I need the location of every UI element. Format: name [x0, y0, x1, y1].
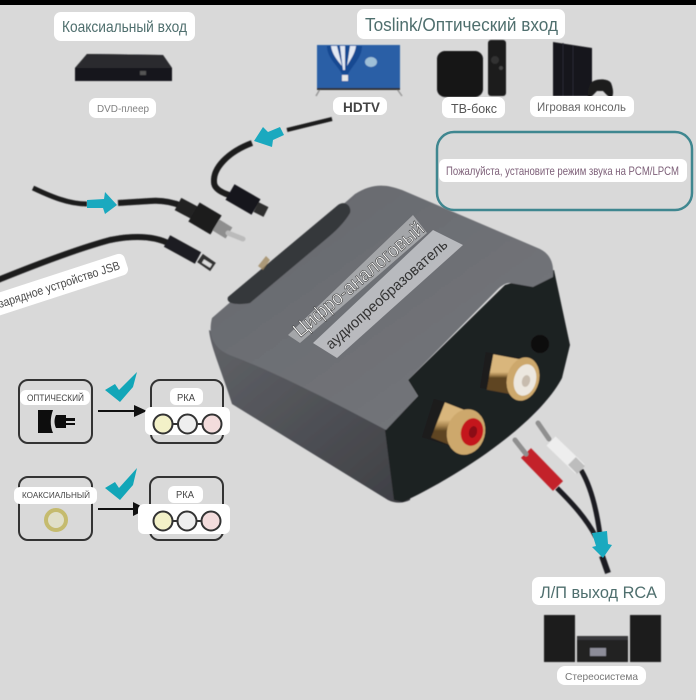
label: HDTV	[333, 97, 387, 115]
RCA ports	[154, 414, 222, 434]
coaxial cable	[33, 188, 243, 239]
arrow: coaxial input	[87, 192, 117, 214]
box: RCA	[151, 380, 223, 443]
icon: optical port	[38, 410, 75, 433]
icon: coaxial port	[46, 510, 66, 530]
title: coaxial input: Коаксиальный вход	[62, 19, 188, 36]
label: RCA: РКА	[177, 393, 195, 404]
title: RCA output	[532, 577, 665, 605]
device: DAC converter	[209, 186, 570, 503]
label: coaxial: КОАКСИАЛЬНЫЙ	[22, 489, 90, 500]
label: DAC name: аудиопреобразователь	[322, 236, 451, 353]
RCA output cable	[515, 423, 608, 573]
red plug	[526, 453, 558, 486]
white plug	[551, 441, 580, 469]
label: TV box	[442, 97, 505, 118]
arrow	[98, 502, 147, 516]
check mark	[105, 468, 137, 500]
icon: DVD player	[75, 54, 172, 81]
diagram: coaxial to RCA	[14, 468, 230, 540]
icon: game console	[553, 42, 613, 97]
icon: stereo system	[544, 615, 661, 662]
label: RCA	[170, 388, 203, 405]
diagram: optical to RCA	[19, 372, 230, 443]
arrow	[98, 405, 147, 417]
label: stereo system: Стереосистема	[565, 671, 638, 683]
label: HDTV: HDTV	[343, 100, 380, 115]
label: game console	[530, 96, 634, 117]
RCA ports	[154, 512, 220, 530]
icon: TV box and remote	[437, 40, 506, 97]
title: Toslink optical input: Toslink/Оптический вход	[365, 15, 558, 35]
label: DVD player	[89, 98, 156, 118]
title: coaxial input	[54, 12, 195, 41]
device black rear panel	[385, 270, 570, 502]
label: USB charger: зарядное устройство JSB	[0, 258, 122, 311]
title: RCA output: Л/П выход RCA	[540, 583, 658, 602]
arrow: RCA output	[592, 531, 612, 558]
label: optical: ОПТИЧЕСКИЙ	[27, 392, 84, 403]
label: RCA	[168, 486, 203, 503]
title: Toslink optical input	[357, 9, 565, 39]
check mark	[105, 372, 137, 402]
device recessed slot	[228, 203, 350, 304]
label: DAC name: Цифро-аналоговый	[289, 218, 429, 342]
optical cable	[214, 119, 332, 212]
label: DVD player: DVD-плеер	[97, 103, 149, 115]
box: RCA	[150, 477, 223, 540]
device side face	[209, 330, 420, 503]
box: optical	[19, 380, 92, 443]
callout: set sound mode	[437, 132, 692, 210]
icon: HDTV	[316, 45, 402, 96]
box: coaxial	[19, 477, 92, 540]
label: TV box: ТВ-бокс	[451, 101, 497, 116]
connector: red RCA	[428, 405, 490, 459]
label: game console: Игровая консоль	[537, 102, 626, 114]
connector: white RCA	[483, 354, 544, 404]
label: stereo system	[557, 666, 646, 685]
label: optical	[20, 390, 90, 405]
label: coaxial	[14, 487, 97, 504]
USB charging cable	[0, 237, 213, 280]
label: RCA: РКА	[176, 490, 194, 501]
arrow: optical input	[254, 127, 284, 147]
device top face	[211, 186, 553, 430]
connector: audio jack	[531, 335, 549, 353]
